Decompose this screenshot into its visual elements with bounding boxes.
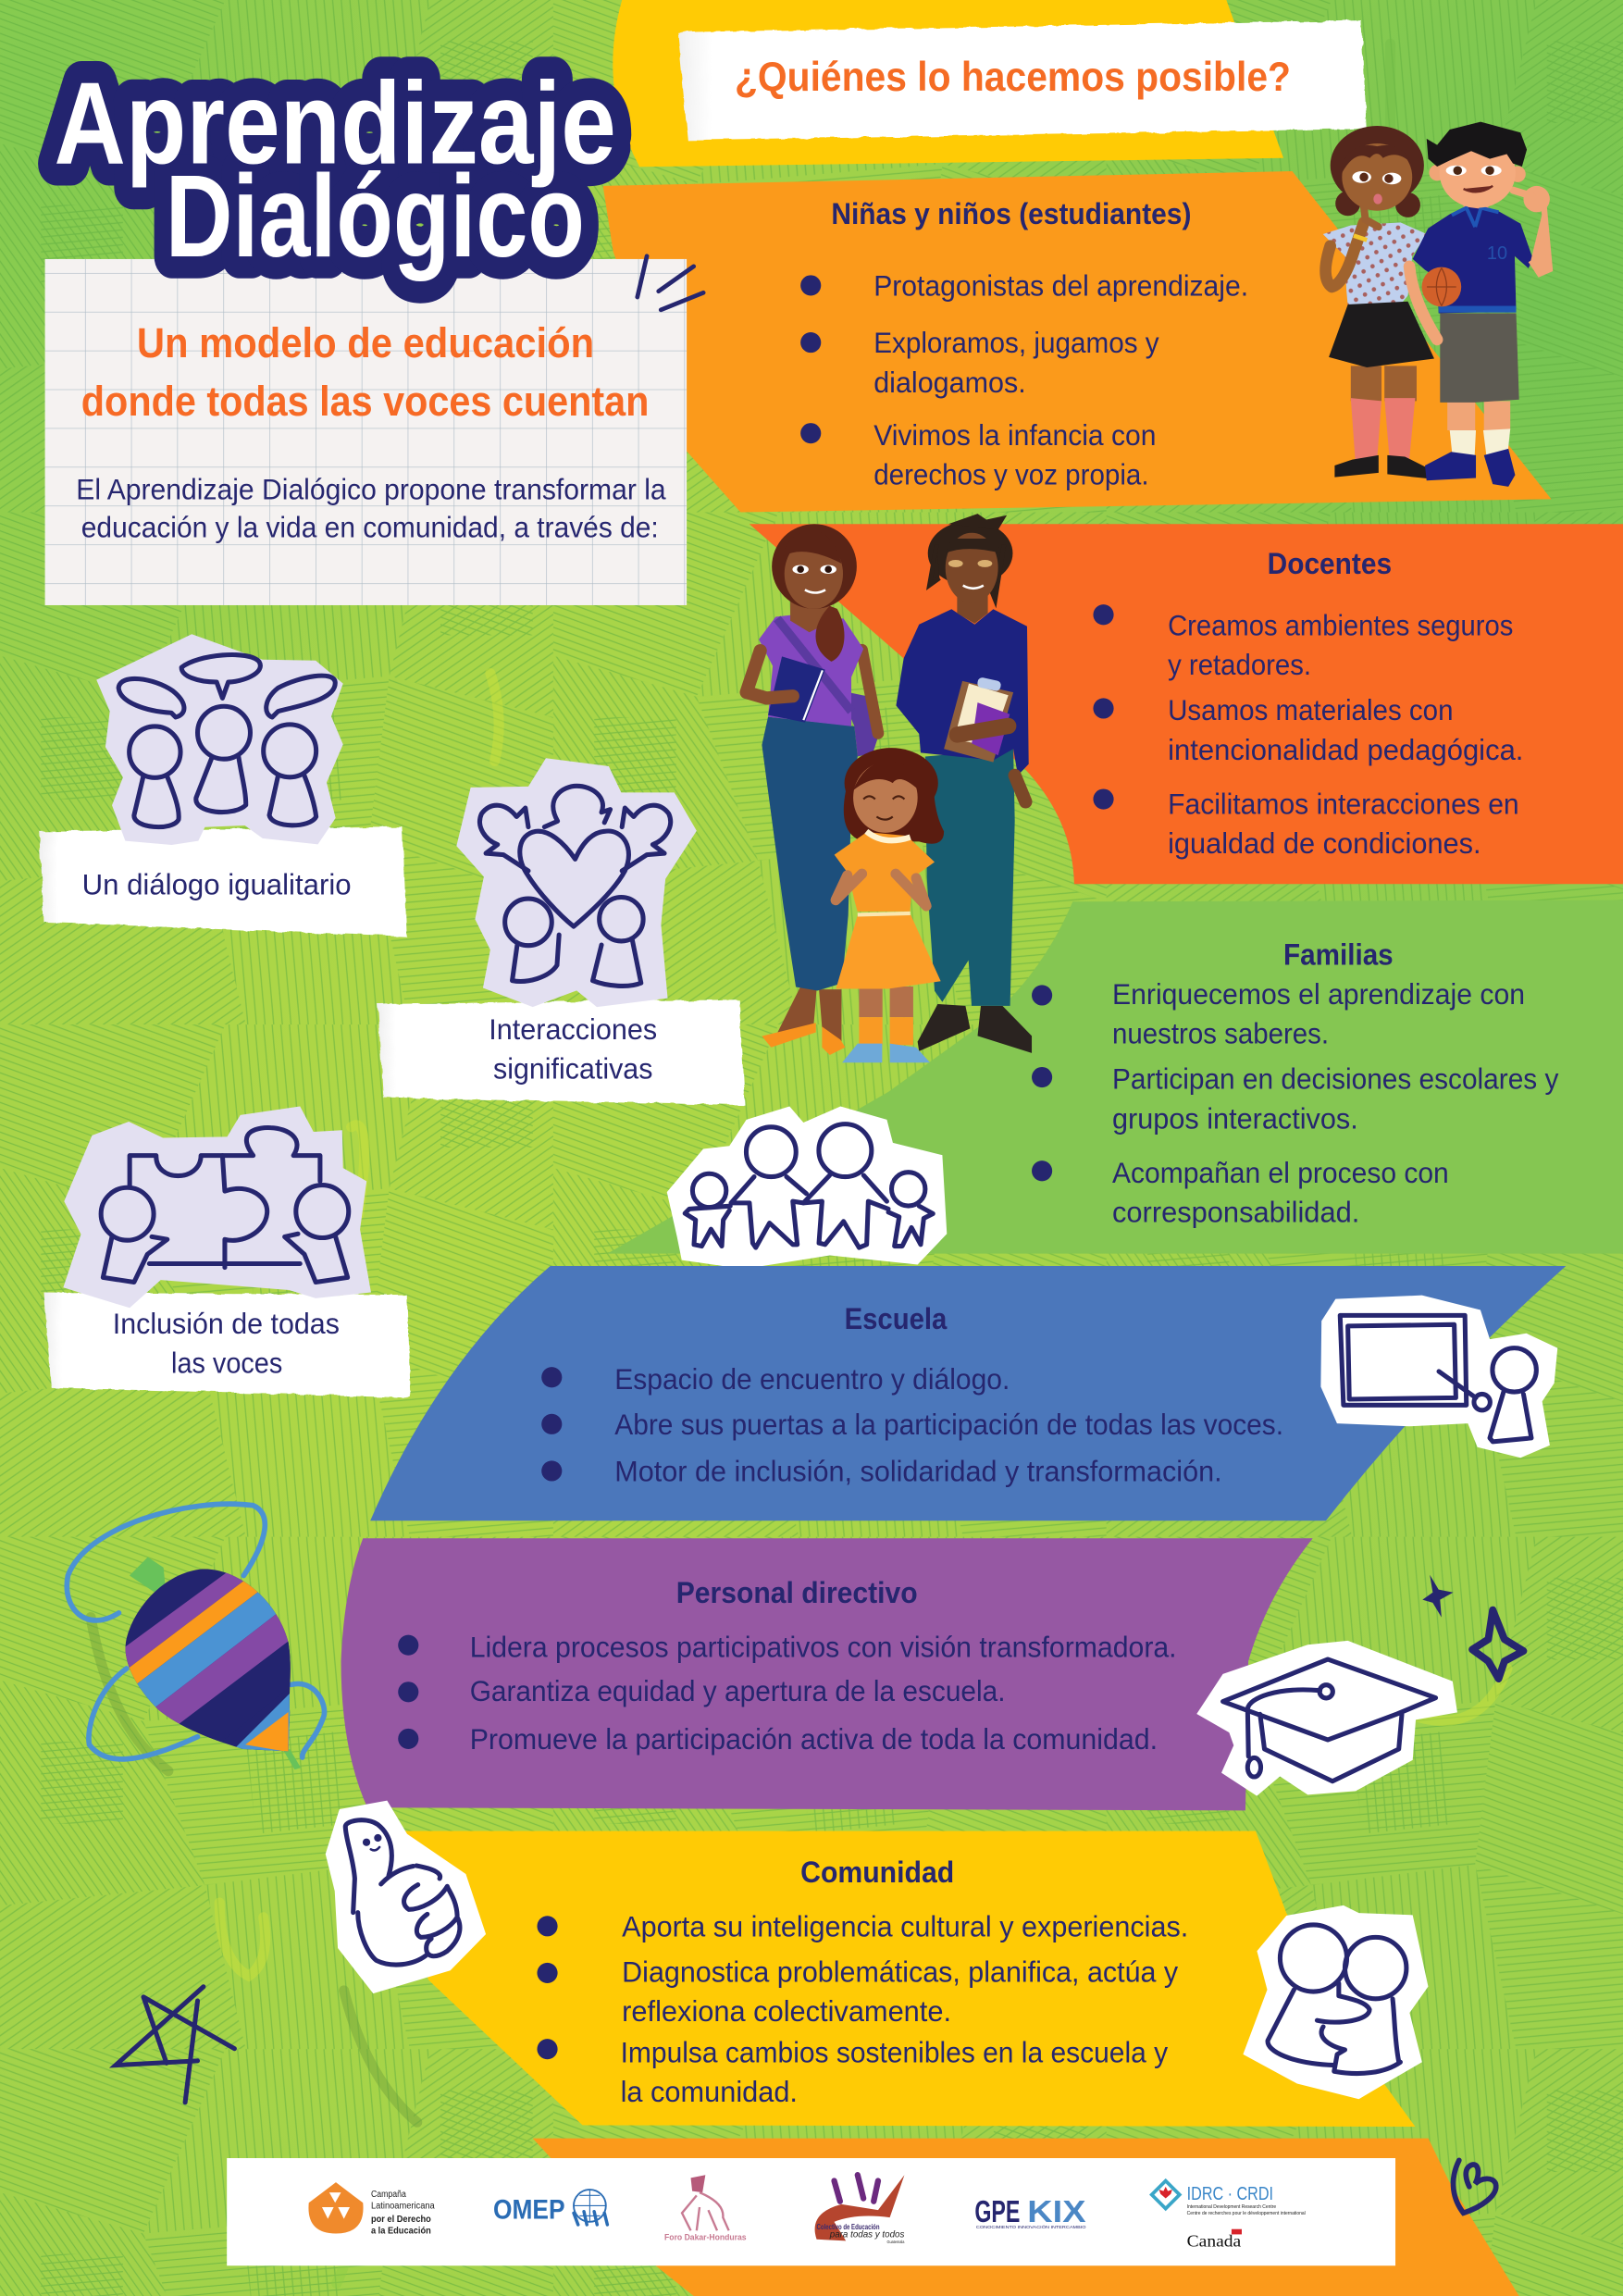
label: Inclusión de todas — [113, 1307, 340, 1340]
logo: GPE KIX — [974, 2195, 1086, 2229]
panel: ¿Quiénes lo hacemos posible? — [613, 0, 1367, 167]
list: escuela: Motor de inclusión, solidaridad y transformación. — [614, 1455, 1222, 1488]
label — [489, 1012, 657, 1086]
label: Un diálogo igualitario — [82, 867, 352, 900]
list: docentes: Creamos ambientes seguros — [1168, 608, 1513, 641]
list: comunidad: Impulsa cambios sostenibles en la escuela y — [621, 2035, 1168, 2068]
logo: Campaña Latinoamericana: Latinoamericana — [371, 2202, 435, 2212]
heading: personal directivo: Personal directivo — [676, 1576, 918, 1609]
logo: OMEP — [493, 2190, 607, 2226]
title: Dialógico — [166, 150, 585, 281]
list: niñas y niños: derechos y voz propia. — [873, 457, 1149, 490]
list: comunidad: Diagnostica problemáticas, planifica, actúa y — [622, 1955, 1178, 1988]
heading: escuela: Escuela — [845, 1302, 948, 1335]
heading: docentes: Docentes — [1268, 547, 1392, 580]
illustration: girl and boy students — [1323, 122, 1550, 487]
list: familias — [1032, 977, 1559, 1229]
icon: puzzle and people — [63, 1107, 371, 1308]
panel: niñas y niños — [603, 171, 1551, 513]
icon: three people talking — [96, 634, 343, 845]
logo: GPE KIX: CONOCIMIENTO INNOVACIÓN INTERCAMBIO — [976, 2224, 1086, 2229]
label — [113, 1307, 340, 1380]
list: escuela: Espacio de encuentro y diálogo. — [614, 1362, 1010, 1396]
logo: Foro Dakar-Honduras: Foro Dakar-Honduras — [664, 2233, 747, 2243]
logo: Foro Dakar-Honduras — [664, 2175, 747, 2243]
logo: IDRC CRDI and Canada: International Development Research Centre — [1187, 2204, 1276, 2210]
list: escuela — [541, 1362, 1283, 1488]
logo: OMEP: OMEP — [493, 2195, 565, 2226]
list: niñas y niños: Exploramos, jugamos y — [873, 326, 1159, 359]
heading: niñas y niños: Niñas y niños (estudiantes) — [831, 197, 1191, 230]
title: Aprendizaje — [55, 56, 616, 188]
logo: Colectivo de Educación: Colectivo de Educación — [817, 2222, 880, 2231]
title: Aprendizaje — [55, 56, 616, 188]
icon: graduation cap — [1196, 1641, 1457, 1796]
label: las voces — [171, 1347, 282, 1380]
illustration: teachers and girl — [747, 514, 1032, 1062]
heading: comunidad: Comunidad — [800, 1855, 954, 1889]
list: docentes: y retadores. — [1168, 648, 1311, 681]
icon: two people hugging — [1243, 1905, 1428, 2099]
label: Interacciones — [489, 1012, 657, 1046]
logo: Campaña Latinoamericana: a la Educación — [371, 2226, 431, 2236]
logo: Campaña Latinoamericana: por el Derecho — [371, 2215, 431, 2225]
list: docentes: igualdad de condiciones. — [1168, 826, 1481, 860]
icon: family holding hands — [667, 1107, 947, 1269]
icon: blackboard and person — [1320, 1296, 1557, 1458]
list: niñas y niños — [800, 268, 1248, 490]
decoration: scribble marks — [638, 256, 703, 310]
item: interacciones significativas — [378, 758, 745, 1105]
list: personal directivo: Promueve la participación activa de toda la comunidad. — [470, 1722, 1158, 1756]
illustration: spinning top — [64, 1501, 328, 1769]
decoration: blue squiggle bottom right — [1454, 2160, 1496, 2213]
list: docentes: intencionalidad pedagógica. — [1168, 733, 1523, 766]
logo: Campaña Latinoamericana — [308, 2182, 435, 2236]
decoration: four point sparkle — [1472, 1610, 1523, 1679]
list: familias: Enriquecemos el aprendizaje con — [1112, 977, 1525, 1011]
panel: personal directivo — [341, 1538, 1457, 1810]
list: escuela: Abre sus puertas a la participación de todas las voces. — [614, 1408, 1283, 1441]
logo: IDRC CRDI and Canada: Centre de recherches pour le développement international — [1187, 2211, 1306, 2216]
list: comunidad: reflexiona colectivamente. — [622, 1994, 951, 2028]
icon: heart and people — [456, 758, 697, 1007]
title: Dialógico — [166, 150, 585, 281]
intro text: El Aprendizaje Dialógico propone transformar la — [76, 472, 666, 505]
intro text: educación y la vida en comunidad, a través de: — [81, 510, 659, 543]
logo: Campaña Latinoamericana: Campaña — [371, 2190, 406, 2200]
list: personal directivo — [398, 1630, 1177, 1756]
list: comunidad — [537, 1909, 1188, 2108]
list: familias: Participan en decisiones escolares y — [1112, 1062, 1559, 1096]
list: docentes: Usamos materiales con — [1168, 693, 1454, 726]
list: familias: corresponsabilidad. — [1112, 1196, 1359, 1229]
logo: Colectivo de Educación — [815, 2175, 905, 2245]
logo: Colectivo de Educación: para todas y todos — [829, 2230, 904, 2240]
list: comunidad: la comunidad. — [621, 2075, 798, 2108]
logo: GPE KIX: KIX — [1027, 2195, 1086, 2229]
list: docentes — [1093, 604, 1523, 860]
item: un diálogo igualitario — [40, 634, 407, 937]
list: docentes: Facilitamos interacciones en — [1168, 787, 1519, 820]
list: niñas y niños: dialogamos. — [873, 366, 1026, 399]
decoration: scribbled star — [116, 1987, 234, 2103]
panel: comunidad — [326, 1801, 1428, 2127]
list: familias: grupos interactivos. — [1112, 1101, 1358, 1135]
list: niñas y niños: Protagonistas del aprendizaje. — [873, 268, 1248, 302]
illustration: girl and boy students: 10 — [1487, 242, 1507, 264]
intro text — [76, 472, 666, 543]
intro card — [45, 259, 687, 605]
heading: familias: Familias — [1283, 937, 1394, 971]
logo: Colectivo de Educación: Guatemala — [886, 2240, 905, 2245]
item: inclusión de todas las voces — [43, 1107, 411, 1397]
panel: escuela — [370, 1266, 1566, 1520]
logo: IDRC CRDI and Canada: Canada — [1187, 2233, 1242, 2251]
icon: thumbs up — [326, 1801, 486, 1993]
subtitle — [81, 319, 649, 425]
title — [55, 56, 616, 281]
list: comunidad: Aporta su inteligencia cultural y experiencias. — [622, 1909, 1188, 1942]
list: familias: nuestros saberes. — [1112, 1017, 1329, 1050]
heading: ¿Quiénes lo hacemos posible?: ¿Quiénes lo hacemos posible? — [735, 55, 1291, 100]
list: familias: Acompañan el proceso con — [1112, 1156, 1449, 1189]
label: significativas — [493, 1052, 652, 1086]
subtitle: donde todas las voces cuentan — [81, 378, 649, 425]
bottom orange band — [533, 2139, 1519, 2296]
logos strip — [227, 2158, 1395, 2265]
list: personal directivo: Lidera procesos participativos con visión transformadora. — [470, 1630, 1177, 1663]
panel: docentes — [750, 524, 1623, 884]
list: personal directivo: Garantiza equidad y apertura de la escuela. — [470, 1674, 1006, 1707]
panel: familias — [607, 900, 1623, 1254]
logo: GPE KIX: GPE — [974, 2195, 1020, 2229]
subtitle: Un modelo de educación — [137, 319, 594, 366]
list: niñas y niños: Vivimos la infancia con — [873, 418, 1156, 452]
decoration: small sparkle — [1422, 1575, 1454, 1618]
logo: IDRC CRDI and Canada — [1152, 2181, 1306, 2251]
logo: IDRC CRDI and Canada: IDRC · CRDI — [1187, 2183, 1273, 2204]
